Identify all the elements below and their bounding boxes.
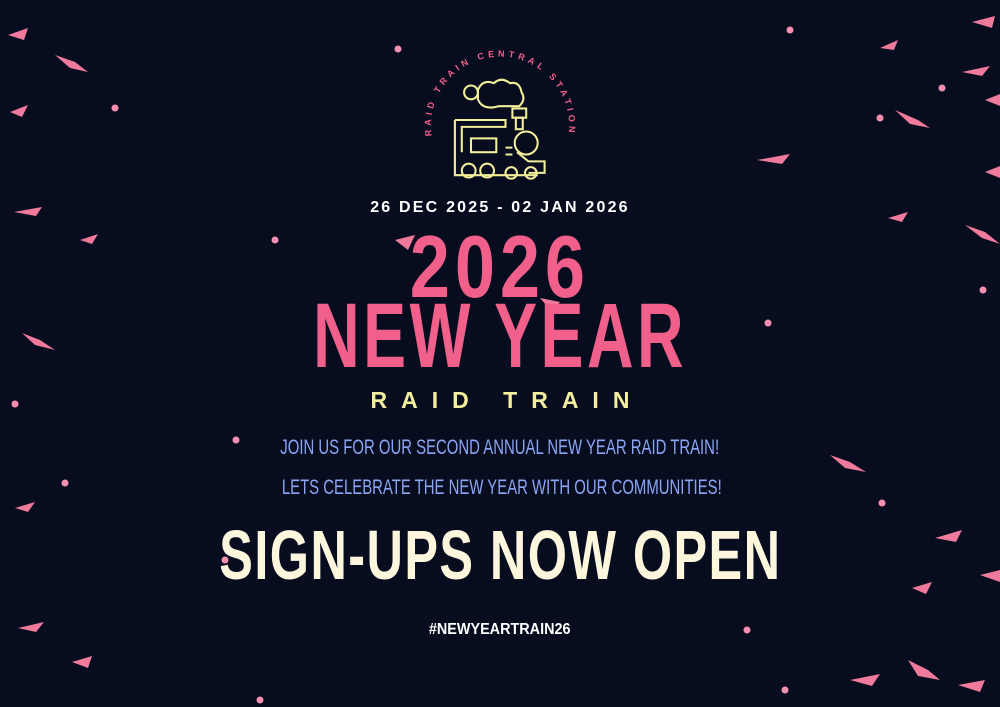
hashtag: #NEWYEARTRAIN26: [429, 621, 571, 638]
text block: invitation: LETS CELEBRATE THE NEW YEAR WITH OUR COMMUNITIES!: [282, 476, 722, 499]
date: 26 DEC 2025 - 02 JAN 2026: [370, 199, 630, 216]
subtitle: raid train: RAID TRAIN: [371, 387, 643, 413]
title: new year: NEW YEAR: [313, 285, 687, 387]
text block: invitation: [280, 436, 722, 499]
headline: sign-ups now open: SIGN-UPS NOW OPEN: [219, 516, 781, 594]
text block: invitation: JOIN US FOR OUR SECOND ANNUAL NEW YEAR RAID TRAIN!: [281, 436, 719, 459]
icon: train: [455, 80, 545, 179]
logo: raid train central station: [424, 50, 576, 180]
logo arc text: RAID TRAIN CENTRAL STATION: [424, 50, 576, 136]
title: 2026: 2026: [410, 217, 590, 316]
